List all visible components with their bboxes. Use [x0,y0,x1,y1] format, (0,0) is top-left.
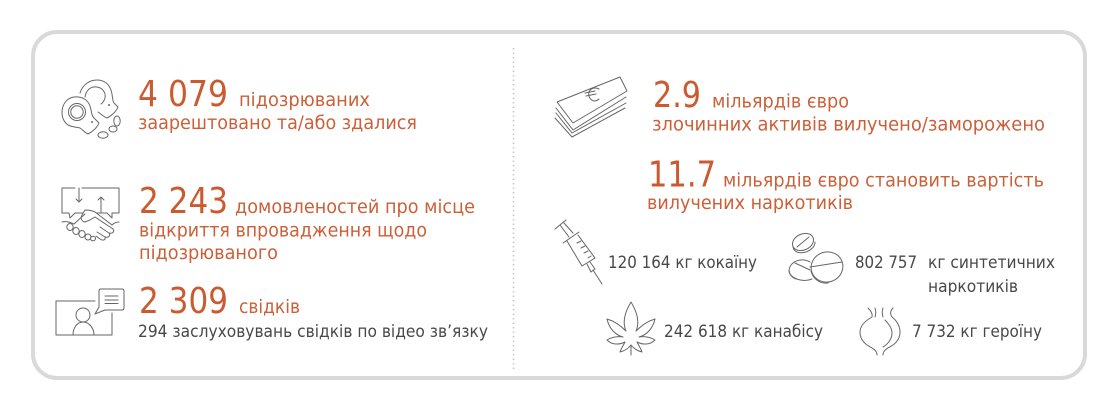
heading: witnesses: свідків [239,297,300,318]
heading: seized assets: злочинних активів вилучено/заморожено [652,114,1045,136]
label: synthetic drugs: 802 757 [855,253,917,272]
label: cocaine: 120 164 кг кокаїну [608,253,757,272]
label: cannabis: 242 618 кг канабісу [664,322,823,341]
label: heroin: 7 732 кг героїну [912,322,1042,341]
heading: drug value: вилучених наркотиків [647,193,853,214]
icon: stack of euro banknotes [555,77,627,137]
heading: witnesses [138,281,488,342]
heading: arrested suspects: заарештовано та/або здалися [138,113,417,134]
icon: poppy / heroin [860,308,900,355]
heading: drug value: мільярдів євро становить вартість [723,170,1044,192]
icon: pills [789,230,847,287]
heading: seized assets: 2.9 [653,75,701,116]
heading: seized assets [652,75,1045,136]
heading: agreements: 2 243 [139,181,228,222]
icon: handshake with arrows [62,188,119,241]
heading: witnesses: 2 309 [139,281,228,322]
heading: arrested suspects: підозрюваних [239,90,370,111]
icon: video call [56,289,124,335]
heading: agreements: підозрюваного [139,243,278,264]
heading: arrested suspects [138,74,417,134]
label: synthetic drugs: кг синтетичних [928,253,1055,272]
heading: arrested suspects: 4 079 [138,74,228,115]
heading: agreements: відкриття впровадження щодо [139,220,427,242]
label: synthetic drugs [855,253,1055,296]
heading: agreements: домовленостей про місце [235,197,475,218]
heading: drug value [647,154,1044,214]
heading: agreements [139,181,475,264]
heading: witnesses: 294 заслуховувань свідків по відео зв’язку [138,322,488,342]
heading: drug value: 11.7 [648,154,716,196]
label: synthetic drugs: наркотиків [928,277,1018,296]
heading: seized assets: мільярдів євро [712,92,849,112]
icon: cannabis leaf [607,302,655,355]
icon: handcuffs [62,80,120,138]
icon: syringe [555,220,602,284]
